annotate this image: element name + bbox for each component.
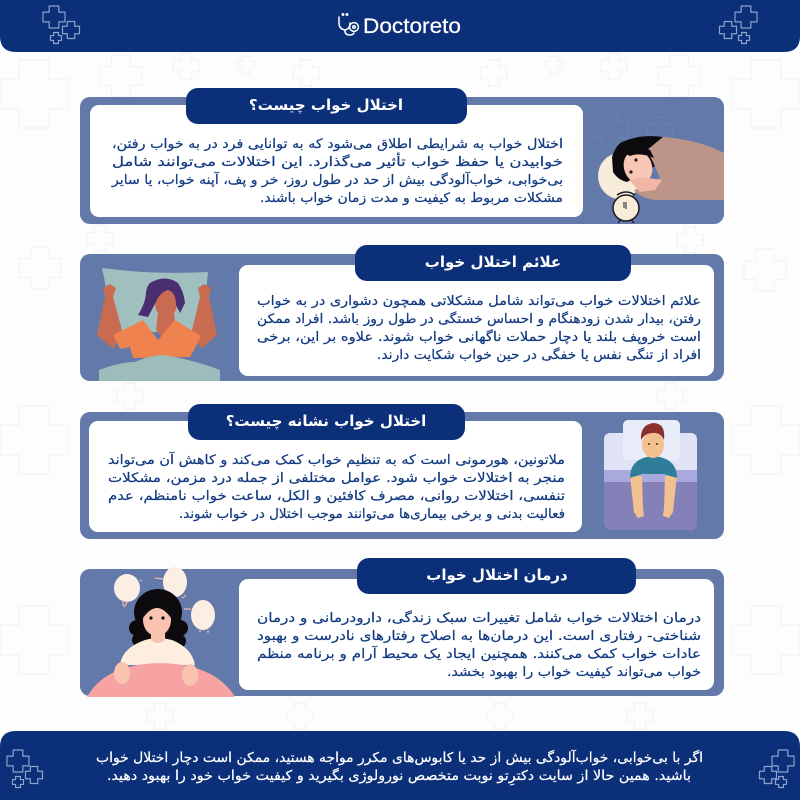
blanket <box>87 663 235 697</box>
body text: اختلال خواب به شرایطی اطلاق می‌شود که به توانایی فرد در به خواب رفتن، <box>112 137 563 152</box>
body text: بی‌خوابی، خواب‌آلودگی بیش از حد در طول روز، خر و پف، آپنه خواب، یا سایر <box>111 171 563 188</box>
icon: plus cluster footer right <box>760 750 794 788</box>
heading pill <box>355 245 631 281</box>
heading pill: علائم اختلال خواب <box>425 253 561 271</box>
heading pill <box>188 404 465 440</box>
heading pill: اختلال خواب نشانه چیست؟ <box>226 412 426 431</box>
footer call to action <box>0 731 800 800</box>
icon: alarm clock <box>613 192 639 223</box>
icon: plus cluster right <box>720 6 757 44</box>
illustration: woman on pillow <box>97 268 220 381</box>
text box <box>90 105 583 217</box>
body text: مشکلات مربوط به کیفیت و مدت زمان خواب باشند. <box>260 191 563 206</box>
text box <box>239 579 714 690</box>
body text: علائم اختلالات خواب می‌تواند شامل مشکلاتی همچون دشواری در به خواب <box>257 294 701 309</box>
body text: فعالیت بدنی و برخی بیماری‌ها می‌توانند موجب اختلال در خواب شوند. <box>179 507 565 522</box>
header bar <box>0 0 800 52</box>
body text: خوابیدن یا حفظ خواب تأثیر می‌گذارد. این اختلالات می‌توانند شامل <box>112 152 563 170</box>
illustration: man in bed <box>604 420 697 530</box>
illustration: woman lying awake with clock <box>598 136 724 223</box>
text box <box>89 421 582 532</box>
body text <box>111 137 563 206</box>
text box <box>239 265 714 376</box>
body text <box>257 294 701 363</box>
icon: plus cluster left <box>43 6 80 44</box>
icon: stethoscope logo <box>339 14 358 35</box>
heading pill <box>186 88 467 124</box>
body text: شناختی- رفتاری است. این درمان‌ها به اصلاح رفتارهای نادرست و بهبود <box>257 629 701 644</box>
body text: افراد از تنگی نفس یا خفگی در حین خواب شکایت دارند. <box>377 347 701 363</box>
panel: what is sleep disorder <box>80 88 724 224</box>
body text: درمان اختلالات خواب شامل تغییرات سبک زندگی، دارودرمانی و درمان <box>257 610 701 626</box>
body text <box>108 451 565 522</box>
panel: symptoms <box>80 245 724 381</box>
logo wordmark: Doctoreto <box>363 15 461 38</box>
blanket <box>99 355 220 381</box>
heading pill: درمان اختلال خواب <box>426 566 568 584</box>
footer text: باشید. همین حالا از سایت دکترِتو نوبت متخصص نورولوژی بگیرید و کیفیت خواب خود را بهبود دهید. <box>107 767 691 785</box>
footer text: اگر با بی‌خوابی، خواب‌آلودگی بیش از حد یا کابوس‌های مکرر مواجه هستید، ممکن است دچار اختلال خواب <box>96 749 703 766</box>
body text: است خروپف بلند یا دچار حملات ناگهانی خواب شوند. علاوه بر این، برخی <box>257 329 701 345</box>
body text: رفتن، بیدار شدن زودهنگام و احساس خستگی در طول روز باشد. افراد ممکن <box>257 311 701 327</box>
hair <box>129 589 188 648</box>
footer text <box>96 749 703 785</box>
body text: خواب می‌تواند کیفیت خواب را بهبود بخشد. <box>447 665 701 680</box>
heading pill: اختلال خواب چیست؟ <box>249 96 403 115</box>
body text: منجر به اختلالات خواب شود. عوامل مختلفی از جمله درد مزمن، مشکلات <box>108 471 565 486</box>
illustration: woman counting sheep <box>87 567 235 697</box>
sheep <box>114 567 215 633</box>
body text: عادات خواب کمک می‌کنند. همچنین ایجاد یک محیط آرام و برنامه منظم <box>257 645 701 662</box>
panel: signs <box>80 404 724 539</box>
body text <box>257 610 701 680</box>
body text: ملاتونین، هورمونی است که به تنظیم خواب کمک می‌کند و کاهش آن می‌تواند <box>108 451 565 468</box>
icon: plus cluster footer left <box>7 750 42 788</box>
body text: تنفسی، اختلالات روانی، مصرف کافئین و الکل، ساعت خواب نامنظم، عدم <box>108 489 565 504</box>
panel: treatment <box>80 558 724 697</box>
heading pill <box>357 558 636 594</box>
